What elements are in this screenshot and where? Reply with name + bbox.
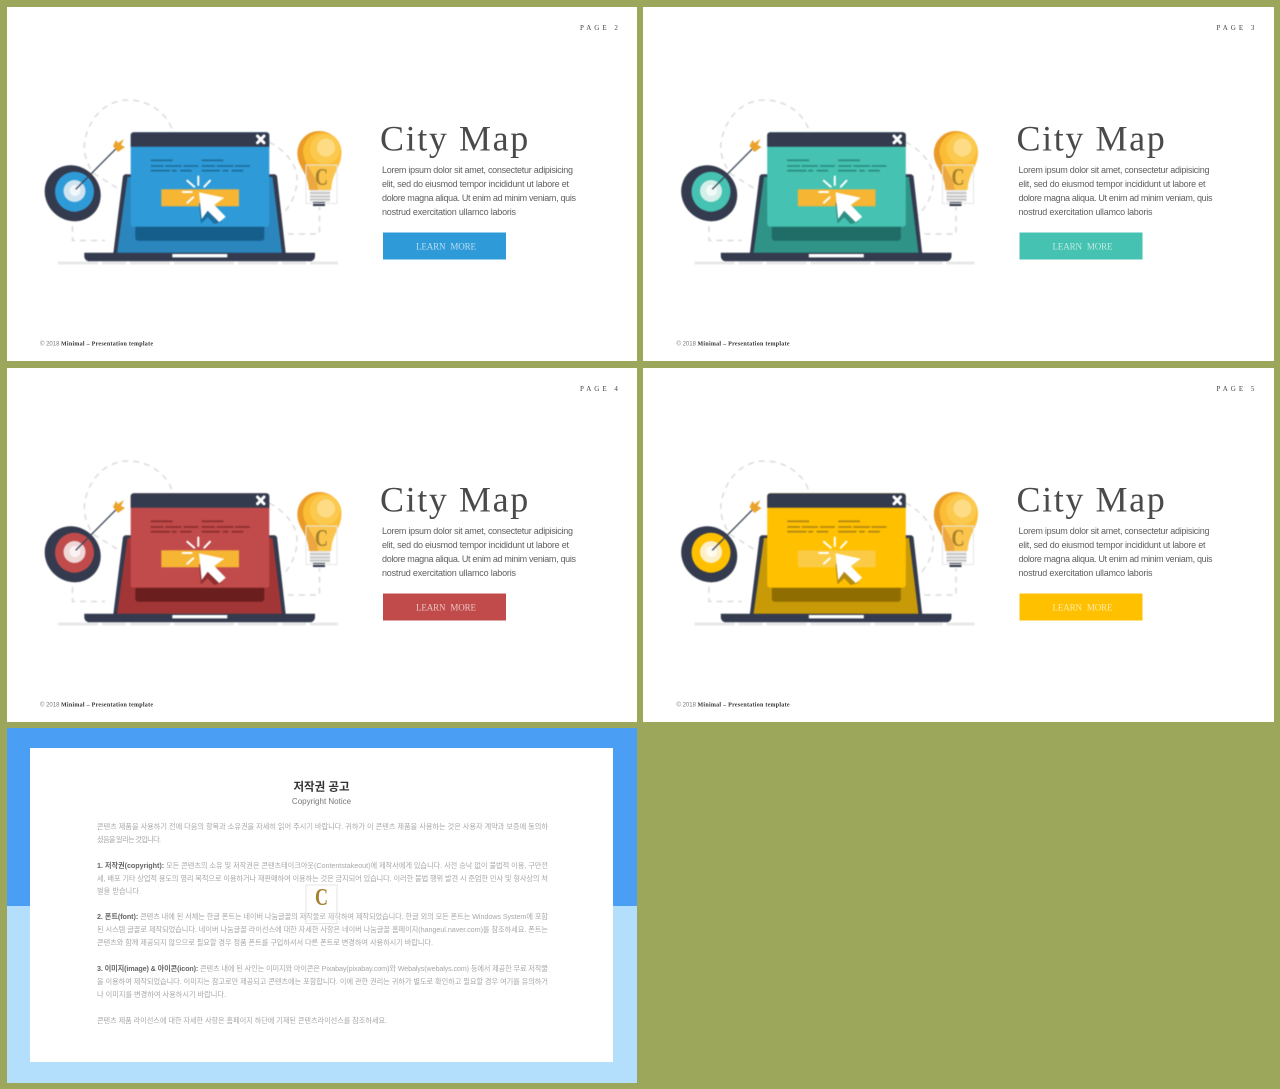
text block: section 3: 나 이미지를 변경하여 사용하시기 바랍니다. <box>97 990 226 999</box>
text block: elit, sed do eiusmod tempor incididunt ut labore et <box>1018 540 1206 550</box>
panel: copyright notice <box>7 728 637 1083</box>
text block: Lorem ipsum dolor sit amet, consectetur adipisicing <box>382 165 573 175</box>
button <box>383 594 506 620</box>
illustration: teal laptop <box>670 100 978 263</box>
text block: section 2 <box>97 912 548 947</box>
panel: red slide <box>7 368 637 722</box>
button: LEARN MORE <box>416 602 476 612</box>
text block: intro: 콘텐츠 제품을 사용하기 전에 다음의 항목과 소유권을 자세히 읽어 주시기 바랍니다. 귀하가 이 콘텐츠 제품을 사용하는 것은 사용자 계약과 보증에 동의하 <box>97 822 548 831</box>
text block: Lorem ipsum dolor sit amet, consectetur adipisicing <box>1018 165 1210 175</box>
text block <box>382 526 576 578</box>
text block: dolore magna aliqua. Ut enim ad minim veniam, quis <box>1018 554 1213 564</box>
footer: Minimal – Presentation template <box>698 702 790 708</box>
text block: intro: 셨음을 알리는 것입니다. <box>97 835 161 844</box>
text block: dolore magna aliqua. Ut enim ad minim veniam, quis <box>382 554 576 564</box>
text block: section 1: 세, 배포 기타 상업적 용도의 영리 목적으로 이용하거나 재판매하여 이용하는 것은 금지되어 있습니다. 이러한 불법 행위 발견 시 준엄한 민사 및 형사상의 처 <box>97 874 548 883</box>
illustration: red laptop <box>33 461 341 624</box>
footer: © 2018 <box>676 702 697 708</box>
button: LEARN MORE <box>1052 602 1113 612</box>
text block: Lorem ipsum dolor sit amet, consectetur adipisicing <box>382 526 573 536</box>
text block: section 2: 2. 폰트(font): 콘텐츠 내에 된 서체는 한글 폰트는 네이버 나눔글꼴의 저작물로 제작하여 제작되었습니다. 한글 외의 모든 폰트는 Windows System에 포함 <box>97 912 548 921</box>
text block: section 1: 벌을 받습니다. <box>97 886 141 896</box>
text block: nostrud exercitation ullamco laboris <box>382 207 516 217</box>
heading: City Map <box>380 480 530 520</box>
page number: PAGE 4 <box>580 385 621 393</box>
text block: section 3: 3. 이미지(image) & 아이콘(icon): 콘텐츠 내에 된 사인는 이미지와 아이콘은 Pixabay(pixabay.com)와 Webalys(webalys.com) 등에서 제공한 무료 저작물 <box>97 964 548 973</box>
text block: section 3: 을 이용하여 제작되었습니다. 이미지는 참고로만 제공되고 콘텐츠에는 포함합니다. 이에 관한 권리는 귀하가 별도로 확인하고 필요할 경우 여기를 유의하거 <box>97 977 548 986</box>
text block: section 3 <box>97 964 548 999</box>
text block <box>382 165 576 217</box>
illustration: yellow laptop <box>670 461 978 624</box>
footer: © 2018 <box>40 702 60 708</box>
text block: elit, sed do eiusmod tempor incididunt ut labore et <box>1018 179 1206 189</box>
footer <box>40 340 153 348</box>
footer <box>676 702 790 708</box>
text block <box>1018 165 1213 217</box>
footer: Minimal – Presentation template <box>698 342 790 348</box>
text block: Lorem ipsum dolor sit amet, consectetur adipisicing <box>1018 526 1210 536</box>
footer: © 2018 <box>676 340 697 348</box>
text block: elit, sed do eiusmod tempor incididunt ut labore et <box>382 540 569 550</box>
heading: City Map <box>1016 480 1166 520</box>
illustration: blue laptop <box>33 100 341 263</box>
text block: section 1 <box>97 861 548 896</box>
heading: copyright notice: 저작권 공고 <box>293 780 350 794</box>
text block: section 2: 콘텐츠와 함께 제공되지 않으므로 필요할 경우 정품 폰트를 구입하셔서 다른 폰트로 변경하여 사용하시기 바랍니다. <box>97 938 433 947</box>
footer: Minimal – Presentation template <box>61 342 153 348</box>
footer <box>40 702 153 708</box>
text block: intro <box>97 822 548 844</box>
footer: Minimal – Presentation template <box>61 702 153 708</box>
text block: elit, sed do eiusmod tempor incididunt ut labore et <box>382 179 569 189</box>
heading: City Map <box>1016 118 1166 158</box>
text block: section 2: 된 시스템 글꼴로 제작되었습니다. 네이버 나눔글꼴 라이선스에 대한 자세한 사항은 네이버 나눔글꼴 홈페이지(hangeul.naver.com)를 참조하세요. 폰트는 <box>97 925 548 934</box>
button: LEARN MORE <box>416 242 476 252</box>
button: LEARN MORE <box>1052 242 1113 252</box>
button <box>383 232 506 260</box>
text block: dolore magna aliqua. Ut enim ad minim veniam, quis <box>1018 193 1213 203</box>
text block: nostrud exercitation ullamco laboris <box>1018 568 1153 578</box>
text block: closing: 콘텐츠 제품 라이선스에 대한 자세한 사항은 홈페이지 하단에 기재된 콘텐츠라이선스를 참조하세요. <box>97 1016 387 1025</box>
text block: nostrud exercitation ullamco laboris <box>1018 207 1153 217</box>
panel: teal slide <box>643 7 1274 361</box>
page number: PAGE 5 <box>1216 385 1257 393</box>
watermark <box>306 884 337 924</box>
footer: © 2018 <box>40 340 60 348</box>
footer <box>676 340 790 348</box>
subheading: Copyright Notice <box>292 797 352 806</box>
text block: dolore magna aliqua. Ut enim ad minim veniam, quis <box>382 193 576 203</box>
button <box>1020 594 1142 620</box>
page number: PAGE 3 <box>1216 24 1257 32</box>
panel: yellow slide <box>643 368 1274 722</box>
text block: section 1: 1. 저작권(copyright): 모든 콘텐츠의 소유 및 저작권은 콘텐츠테이크아웃(Contentstakeout)에 제작사에게 있습니다. 사전 승낙 없이 불법적 이용, 구만전 <box>97 861 548 870</box>
page number: PAGE 2 <box>580 24 621 32</box>
button <box>1020 232 1142 260</box>
text block <box>1018 526 1213 578</box>
heading: City Map <box>380 118 530 158</box>
panel: blue slide <box>7 7 637 361</box>
text block: nostrud exercitation ullamco laboris <box>382 568 516 578</box>
